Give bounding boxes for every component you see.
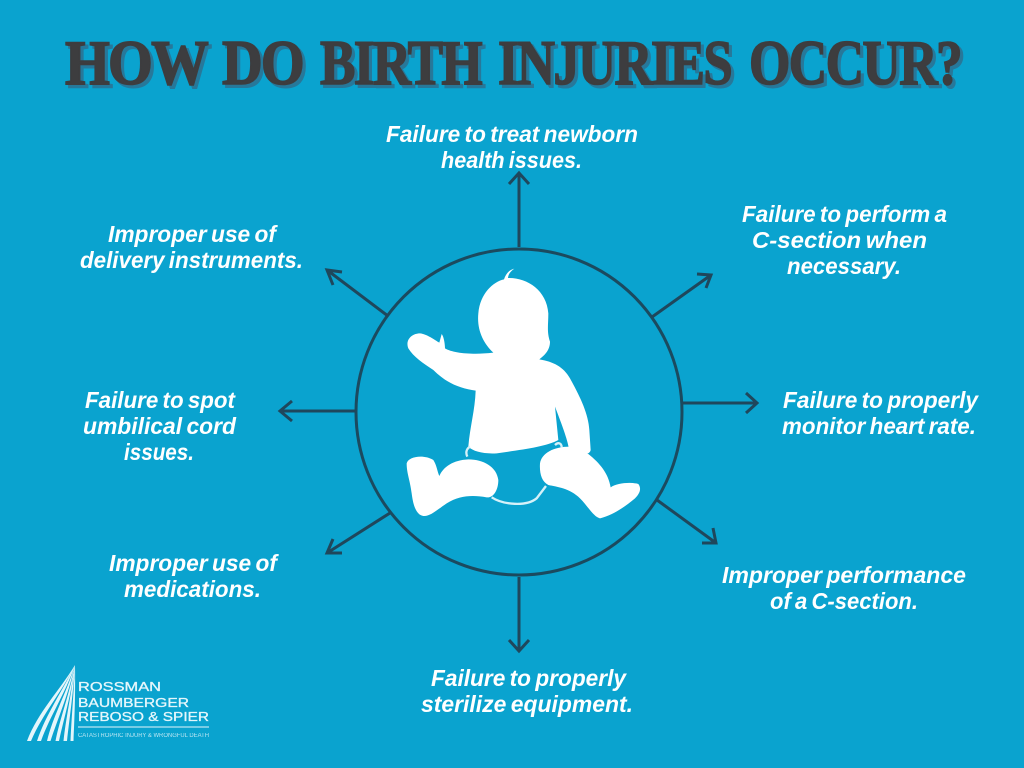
label: delivery instruments (80, 221, 303, 273)
central circle (356, 249, 682, 575)
title: HOW (68, 30, 211, 101)
label: improper performance: of a C-section. (770, 588, 918, 614)
label: improper performance: Improper performance (722, 562, 966, 588)
label: delivery instruments: Improper use of (108, 221, 278, 247)
icon: baby silhouette (407, 269, 640, 518)
label: C-section when necessary: Failure to perform a (742, 201, 947, 227)
label: umbilical cord: Failure to spot (85, 387, 236, 413)
logo wordmark (78, 680, 209, 724)
title: OCCUR? (752, 30, 964, 101)
logo wordmark: REBOSO & SPIER (78, 710, 209, 724)
label: newborn health: health issues. (441, 147, 582, 173)
title: DO (225, 30, 306, 101)
label: C-section when necessary (742, 201, 947, 279)
title: INJURIES (498, 27, 731, 98)
label: umbilical cord: issues. (124, 439, 194, 465)
label: medications: medications. (124, 576, 261, 602)
logo mark (27, 665, 75, 741)
label: umbilical cord (83, 387, 237, 465)
label: heart rate (782, 387, 979, 439)
arrow: upper left (327, 270, 388, 316)
arrow: right (683, 393, 757, 413)
title (65, 27, 964, 101)
logo tagline: CATASTROPHIC INJURY & WRONGFUL DEATH (78, 733, 209, 739)
title: DO (222, 27, 303, 98)
label: heart rate: Failure to properly (783, 387, 979, 413)
title: INJURIES (501, 30, 734, 101)
arrow: down (509, 577, 529, 651)
label: sterilize equipment (421, 665, 633, 717)
arrow: lower left (327, 513, 390, 553)
arrow: up (509, 173, 529, 247)
arrow: upper right (652, 274, 711, 317)
logo wordmark: BAUMBERGER (78, 696, 189, 710)
label: newborn health: Failure to treat newborn (386, 121, 638, 147)
title: BIRTH (320, 27, 482, 98)
label: improper performance (722, 562, 966, 614)
label: medications (109, 550, 279, 602)
title: OCCUR? (749, 27, 961, 98)
label: newborn health (386, 121, 638, 173)
label: medications: Improper use of (109, 550, 279, 576)
logo wordmark: ROSSMAN (78, 680, 161, 694)
logo (27, 665, 209, 741)
label: C-section when necessary: necessary. (787, 253, 901, 279)
arrow: lower right (657, 500, 716, 543)
label: umbilical cord: umbilical cord (83, 413, 237, 439)
title: HOW (65, 27, 208, 98)
label: C-section when necessary: C-section when (752, 227, 927, 253)
label: heart rate: monitor heart rate. (782, 413, 976, 439)
title: BIRTH (323, 30, 485, 101)
label: sterilize equipment: Failure to properly (431, 665, 627, 691)
arrow: left (280, 401, 356, 421)
label: sterilize equipment: sterilize equipment. (421, 691, 633, 717)
label: delivery instruments: delivery instruments. (80, 247, 303, 273)
